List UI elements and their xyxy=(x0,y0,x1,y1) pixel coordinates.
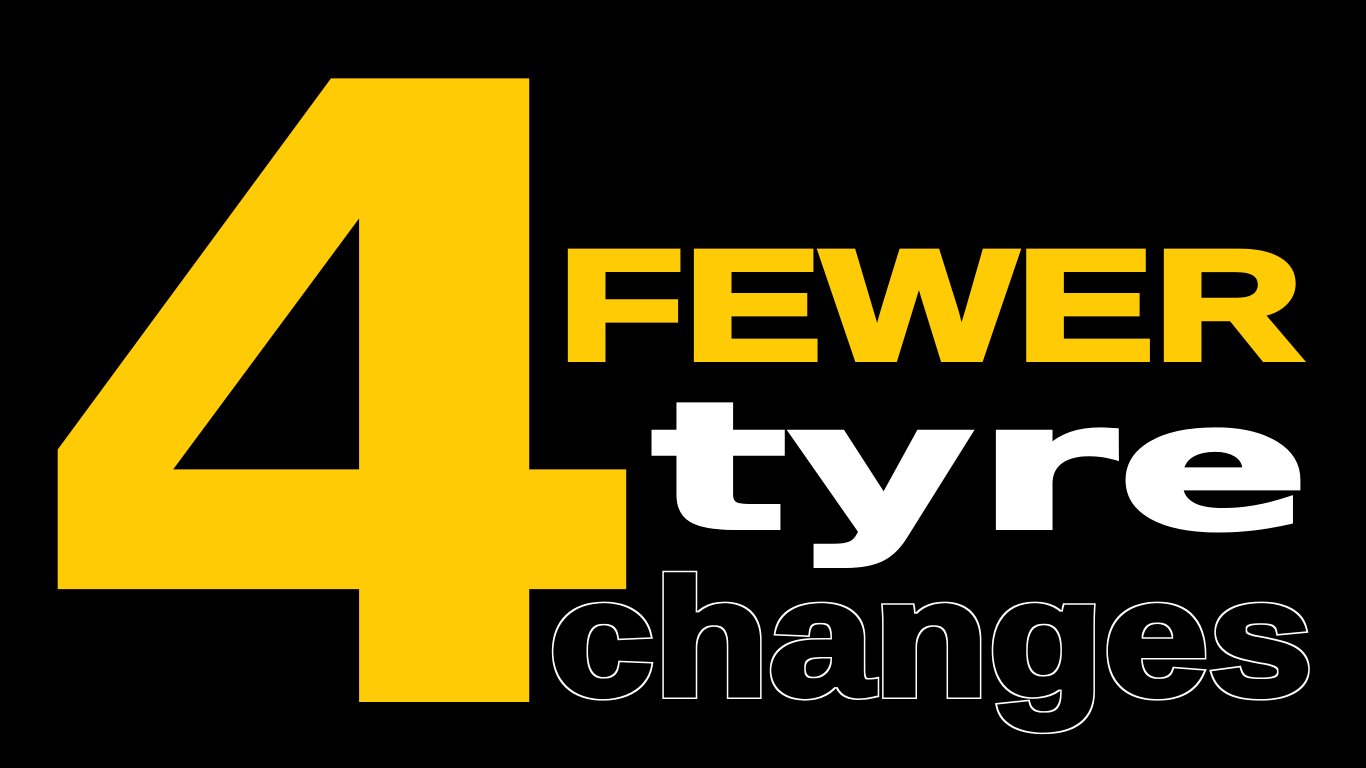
word: FEWER: FEWER xyxy=(558,219,1303,393)
word: changes (outlined): changes xyxy=(549,546,1313,731)
word: tyre: tyre xyxy=(651,365,1311,570)
